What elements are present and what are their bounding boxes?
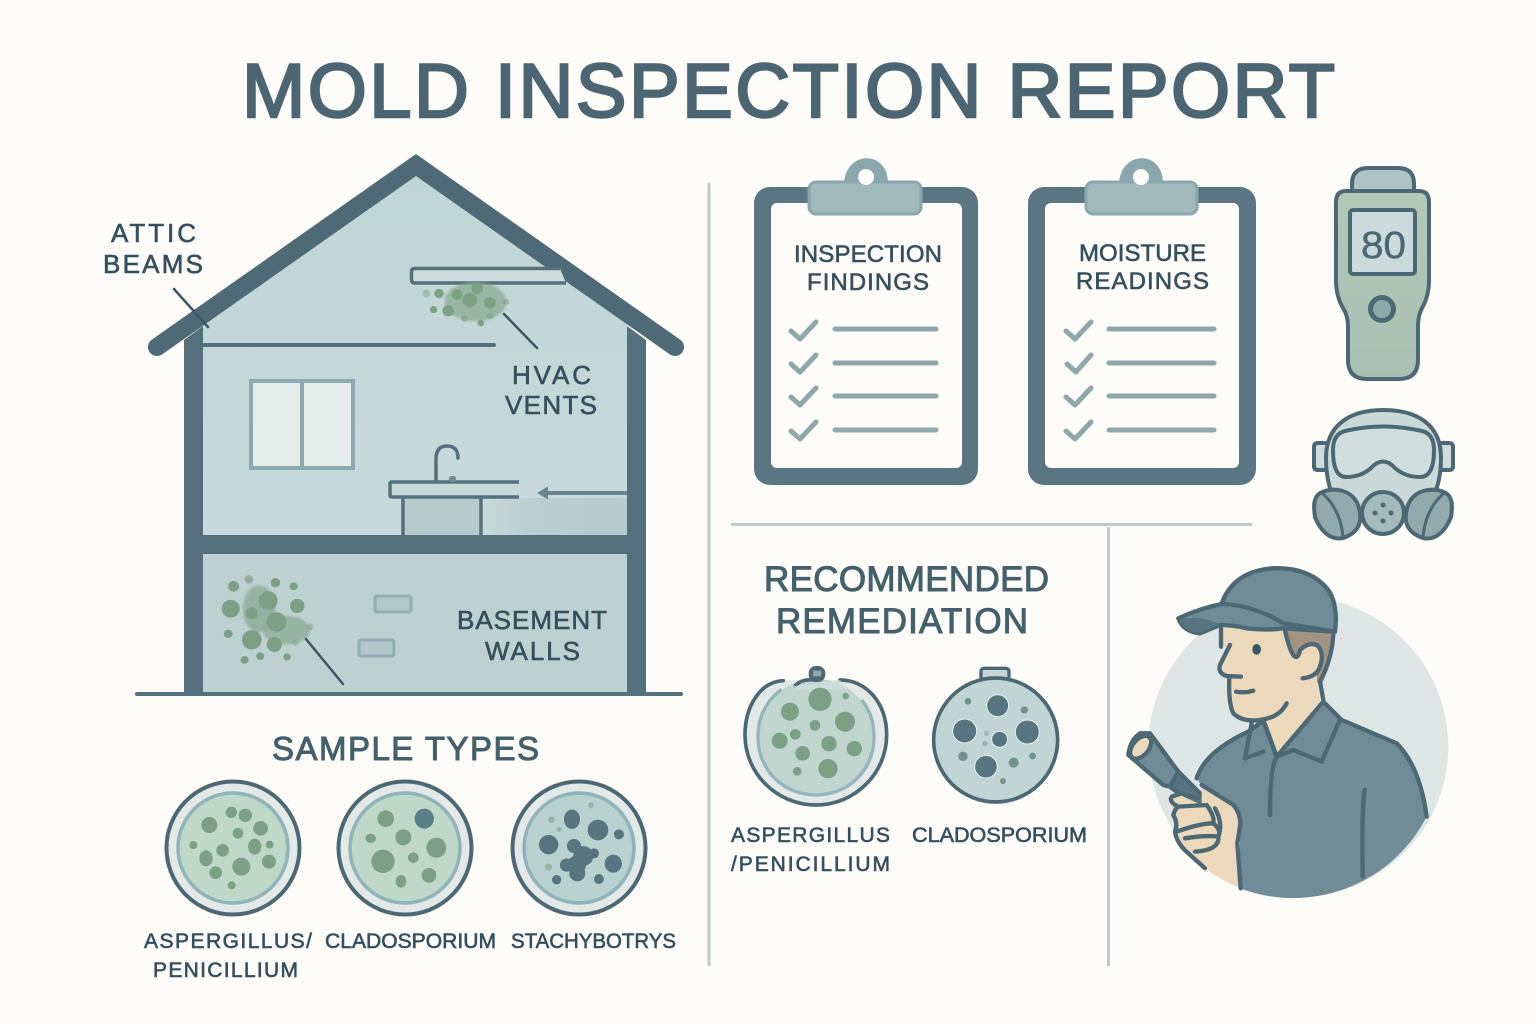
- petri dish: stachybotrys sample: [512, 782, 646, 914]
- house walls: [184, 326, 646, 694]
- floor slab: [203, 535, 627, 554]
- basement background: [203, 554, 627, 694]
- caption: aspergillus/penicillium: ASPERGILLUS/: [144, 930, 312, 953]
- attic floor line: [203, 343, 494, 347]
- label: HVAC vents: VENTS: [505, 390, 597, 420]
- hair: [1283, 628, 1333, 685]
- goggles: [1333, 426, 1434, 477]
- label: HVAC vents: HVAC: [512, 360, 591, 390]
- clipboard heading: [794, 241, 942, 296]
- basement vents: [359, 596, 411, 656]
- heading: recommended remediation: RECOMMENDED: [764, 560, 1049, 599]
- label: basement walls: WALLS: [485, 636, 580, 666]
- caption: aspergillus/penicillium remediation: ASPERGILLUS: [731, 824, 890, 847]
- meter button: [1368, 295, 1396, 323]
- clip: [1086, 158, 1197, 214]
- face and neck: [1220, 625, 1322, 757]
- kitchen sink and counter: [390, 446, 627, 535]
- house cross-section diagram: [137, 165, 681, 694]
- clipboard heading: READINGS: [1076, 268, 1209, 295]
- title: MOLD INSPECTION REPORT: [242, 49, 1335, 134]
- checklist: [1066, 322, 1214, 439]
- checklist: [791, 322, 936, 439]
- ear tabs: [1314, 443, 1453, 470]
- clipboard heading: [1076, 240, 1209, 295]
- backdrop circle: [1148, 597, 1448, 897]
- cap: [1222, 568, 1336, 632]
- caption: stachybotrys: STACHYBOTRYS: [511, 930, 676, 953]
- petri dish: aspergillus/penicillium remediation: [745, 666, 887, 805]
- label: HVAC vents: [505, 360, 597, 420]
- illustration: inspector with flashlight: [1126, 568, 1448, 898]
- label: basement walls: [457, 605, 607, 666]
- hood: [1326, 410, 1441, 510]
- caption: aspergillus/penicillium remediation: /PENICILLIUM: [731, 853, 890, 876]
- house interior: [203, 165, 627, 694]
- heading: sample types: SAMPLE TYPES: [272, 730, 539, 767]
- filter: [1362, 492, 1404, 534]
- clipboard heading: INSPECTION: [794, 241, 942, 268]
- heading: recommended remediation: REMEDIATION: [776, 602, 1028, 641]
- window: [251, 381, 353, 468]
- heading: recommended remediation: [764, 560, 1049, 641]
- roof: [157, 165, 675, 347]
- label: attic beams: ATTIC: [111, 218, 196, 248]
- ground line: [137, 692, 681, 696]
- clipboard: inspection findings: [754, 158, 978, 485]
- HVAC vent: [412, 268, 566, 283]
- icon: moisture meter: [1336, 168, 1429, 379]
- label: basement walls: BASEMENT: [457, 605, 607, 635]
- caption: aspergillus/penicillium: [144, 930, 312, 982]
- polo shirt: [1197, 702, 1427, 898]
- caption: cladosporium: CLADOSPORIUM: [325, 930, 496, 953]
- icon: respirator mask with goggles: [1314, 410, 1453, 538]
- caption: aspergillus/penicillium remediation: [731, 824, 890, 876]
- HVAC vent mold patch: [422, 282, 510, 326]
- label: attic beams: BEAMS: [103, 249, 203, 279]
- clipboard heading: FINDINGS: [807, 269, 929, 296]
- caption: cladosporium remediation: CLADOSPORIUM: [912, 824, 1087, 847]
- arrow pointing to sink: [541, 490, 627, 496]
- flashlight: [1126, 732, 1213, 813]
- caption: aspergillus/penicillium: PENICILLIUM: [153, 959, 298, 982]
- left cartridge: [1314, 490, 1360, 538]
- hand: [1170, 785, 1241, 888]
- petri dish: cladosporium sample: [338, 782, 472, 914]
- petri dish: cladosporium remediation: [934, 668, 1058, 802]
- leader lines: [174, 289, 537, 684]
- clipboard: moisture readings: [1028, 158, 1256, 485]
- petri dish: aspergillus/penicillium sample: [166, 782, 300, 914]
- collar and placket: [1245, 720, 1365, 877]
- basement mold patch: [222, 575, 313, 664]
- eye: [1252, 644, 1261, 655]
- clip: [809, 158, 921, 214]
- clipboard heading: MOISTURE: [1079, 240, 1206, 267]
- label: attic beams: [103, 218, 203, 279]
- meter reading: 80: [1361, 225, 1406, 267]
- right cartridge: [1406, 490, 1452, 538]
